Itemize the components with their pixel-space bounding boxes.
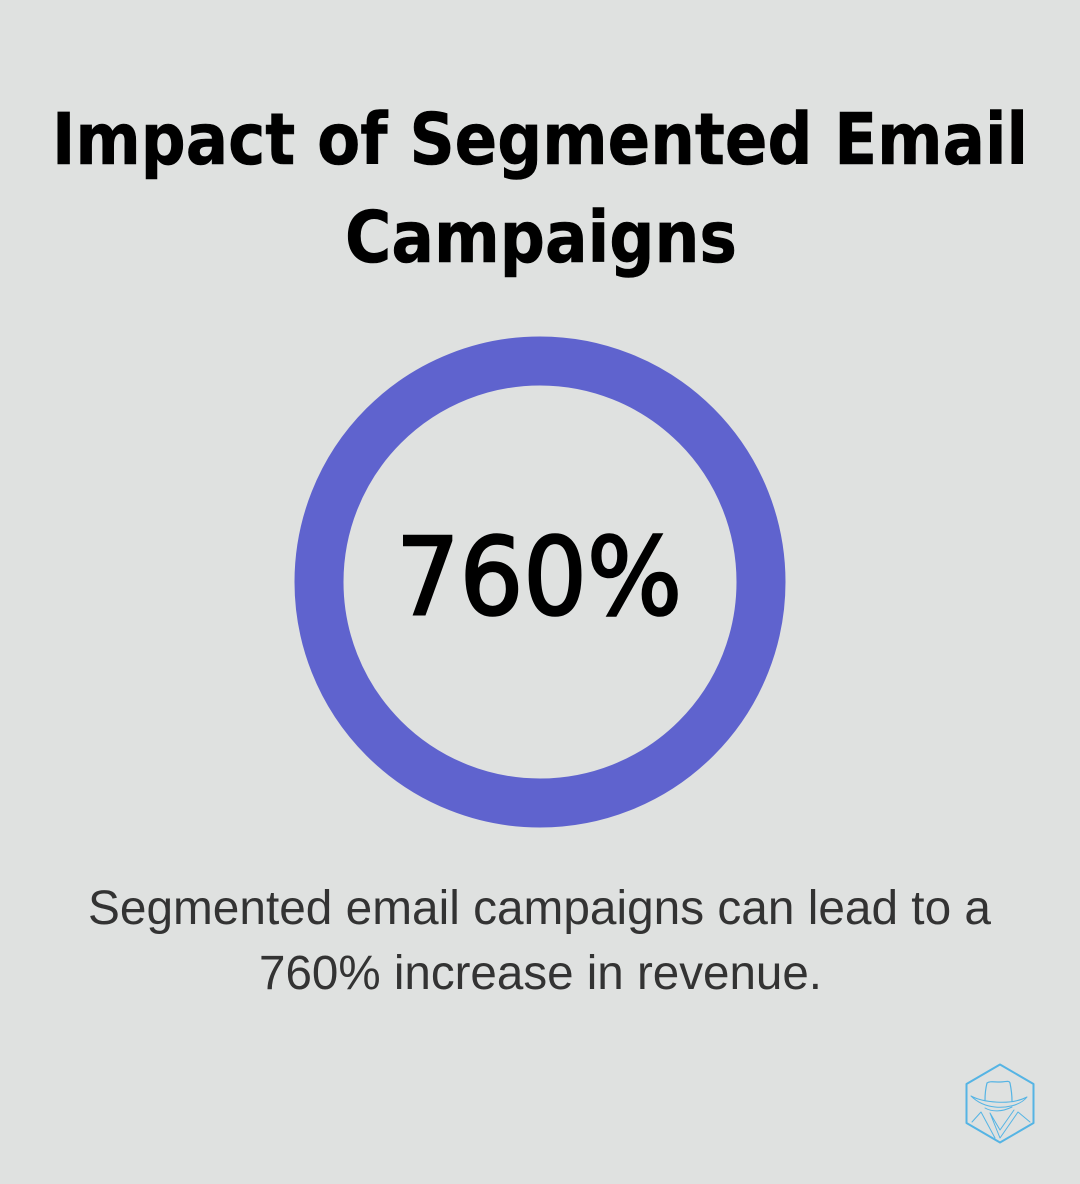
icon: logo hexagon with hat and coat [966,1064,1034,1142]
donut ring [319,361,761,803]
center value: 760% [396,516,682,640]
title: Campaigns [345,196,737,279]
description text: Segmented email campaigns can lead to a [88,882,991,935]
description text [88,882,991,1000]
title [52,98,1028,279]
description text: 760% increase in revenue. [259,947,822,1000]
